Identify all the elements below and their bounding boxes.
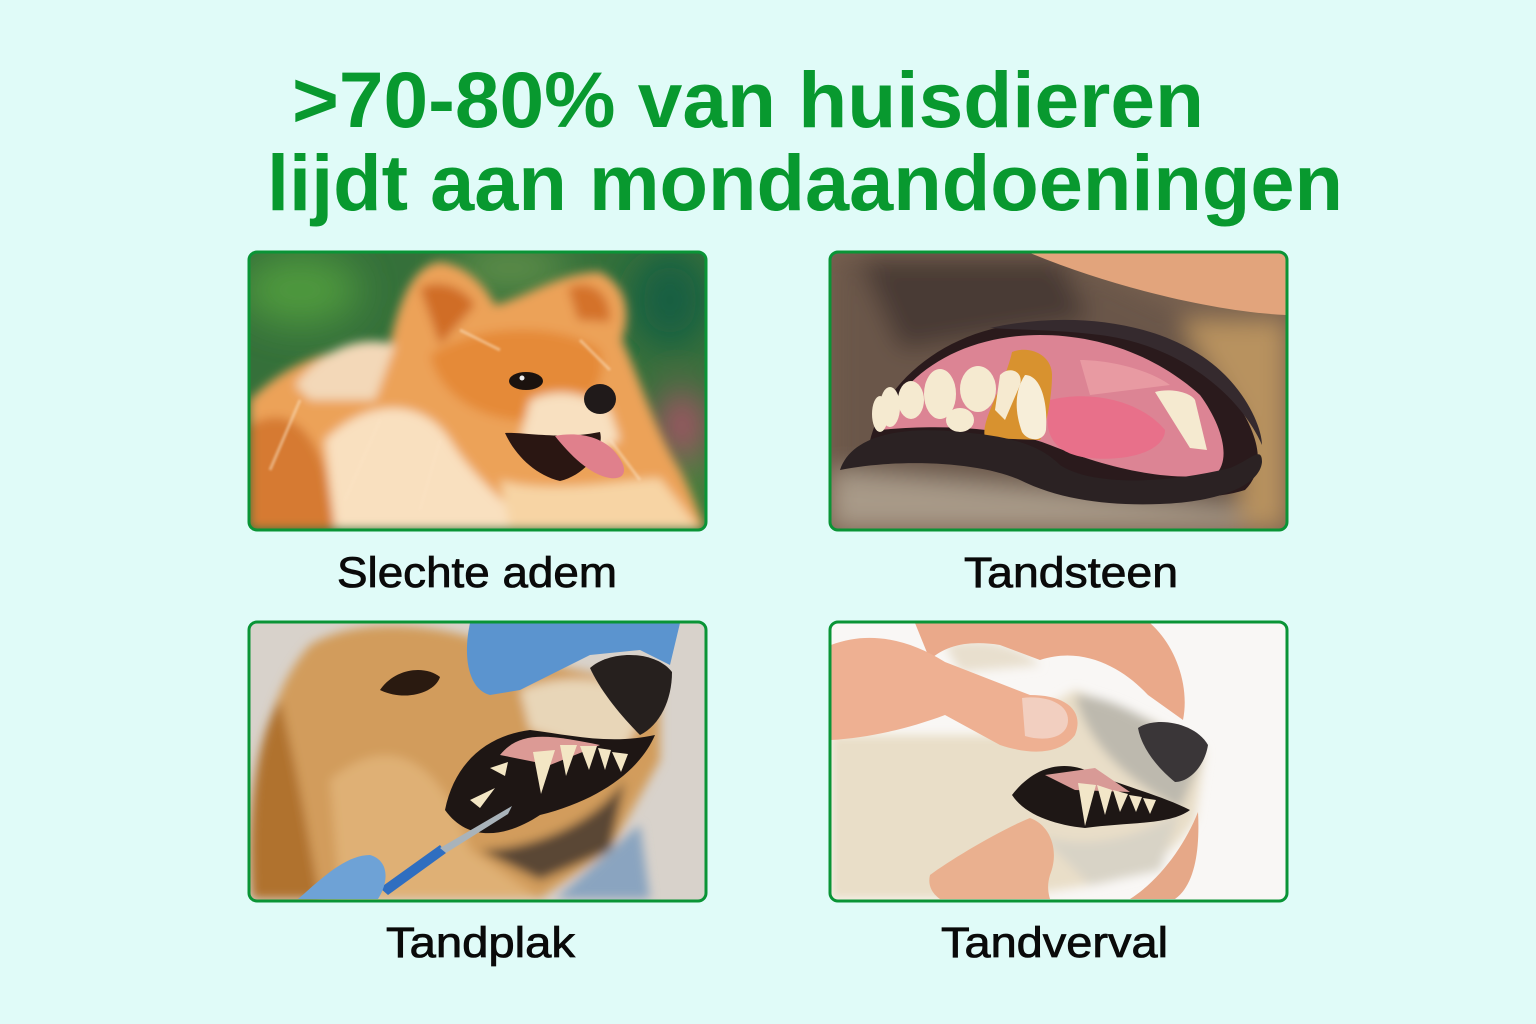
photo frame — [830, 622, 1287, 901]
fur highlights — [268, 328, 641, 480]
label: Tandverval — [941, 919, 1168, 967]
panel: tandsteen — [830, 252, 1287, 597]
label: Slechte adem — [337, 549, 617, 597]
photo frame — [249, 252, 706, 530]
tongue — [555, 434, 624, 478]
panel: tandverval — [830, 622, 1287, 967]
mouth — [505, 432, 601, 481]
mouth — [445, 730, 655, 833]
photo frame — [249, 622, 706, 901]
panel: tandplak — [249, 622, 706, 967]
tongue — [1047, 396, 1165, 459]
lower lip — [840, 430, 1262, 504]
title — [267, 55, 1343, 227]
panel: slechte adem — [240, 250, 710, 597]
mouth — [1012, 766, 1190, 828]
photo: pomeranian with tongue out — [240, 250, 710, 529]
title: lijdt aan mondaandoeningen — [267, 138, 1343, 227]
fingers on top — [915, 623, 1185, 720]
label: Tandsteen — [964, 549, 1178, 597]
mouth opening — [868, 321, 1258, 497]
lower hand — [929, 818, 1054, 899]
photo: mouth with tartar — [831, 253, 1286, 529]
title: >70-80% van huisdieren — [292, 55, 1204, 144]
teeth — [872, 366, 1207, 450]
teeth — [470, 745, 628, 808]
nose — [584, 384, 616, 414]
upper lip — [990, 320, 1262, 445]
gums — [880, 335, 1224, 477]
teeth — [1078, 783, 1156, 826]
eye — [509, 372, 543, 390]
infographic canvas — [248, 70, 1338, 966]
photo frame — [830, 252, 1287, 530]
finger — [1030, 253, 1286, 315]
photo: hands opening dog's mouth — [831, 623, 1286, 900]
nose — [590, 655, 672, 735]
thumbnail — [1022, 697, 1068, 739]
tartar tooth — [984, 350, 1052, 440]
eye — [380, 670, 440, 696]
label: Tandplak — [386, 919, 576, 967]
lower glove — [298, 855, 386, 899]
dental tool — [380, 845, 446, 895]
photo: golden retriever with gloved hands — [250, 623, 705, 900]
glove — [467, 623, 680, 695]
thumb — [831, 638, 1078, 752]
nose — [1138, 722, 1208, 782]
